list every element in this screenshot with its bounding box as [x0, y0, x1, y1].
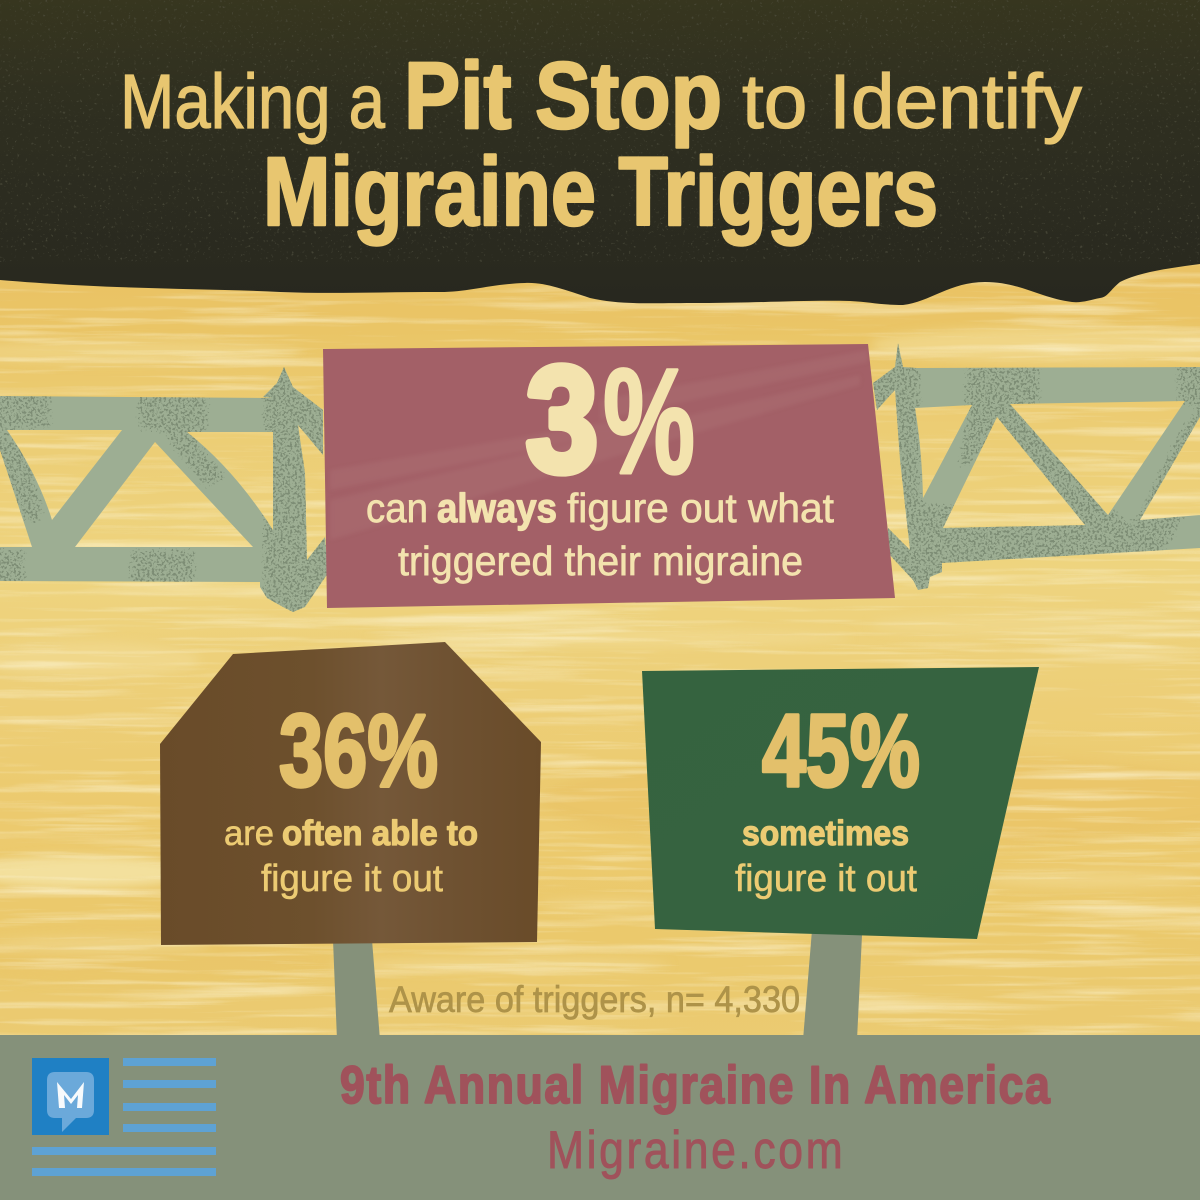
sand background — [0, 250, 1200, 1050]
right bridge truss — [873, 343, 1200, 590]
caption: often able: are — [224, 814, 274, 853]
top dark band — [0, 0, 1200, 305]
title — [120, 43, 1083, 246]
statistic: 45%: 45% — [762, 693, 920, 808]
caption: often able — [224, 814, 478, 900]
caption: often able: often able to — [282, 814, 478, 853]
caption: can always figure out: triggered their migraine — [398, 538, 803, 584]
footer source text: 9th Annual Migraine In America — [340, 1056, 1051, 1115]
panel: 36% sign — [160, 642, 541, 945]
caption: can always figure out: can — [366, 485, 428, 531]
title: Pit Stop — [404, 43, 722, 149]
caption: sometimes — [735, 814, 917, 900]
statistic: 36%: 36% — [279, 693, 438, 808]
caption: can always figure out: figure out what — [567, 485, 835, 531]
sign posts — [333, 930, 862, 1040]
panel: 3% sign — [323, 335, 895, 608]
sample size note: Aware of triggers, n= 4,330 — [389, 979, 800, 1020]
panel: 45% sign — [642, 667, 1039, 939]
footer band — [0, 1035, 1200, 1200]
statistic: 3%: 3 — [526, 335, 598, 503]
caption: often able: figure it out — [261, 858, 443, 900]
logo: migraine.com flag — [32, 1058, 216, 1176]
statistic: 3% — [526, 335, 695, 505]
caption: can always figure out: always — [437, 485, 557, 531]
footer source text — [340, 1056, 1051, 1180]
caption: can always figure out — [366, 485, 835, 584]
footer source text: Migraine.com — [547, 1121, 843, 1180]
title: to Identify — [742, 59, 1083, 145]
caption: sometimes: sometimes — [742, 814, 909, 853]
left bridge truss — [0, 367, 326, 612]
title: Migraine Triggers — [263, 137, 938, 246]
statistic: 3%: % — [603, 337, 695, 505]
caption: sometimes: figure it out — [735, 858, 917, 900]
title: Making a — [120, 59, 385, 145]
